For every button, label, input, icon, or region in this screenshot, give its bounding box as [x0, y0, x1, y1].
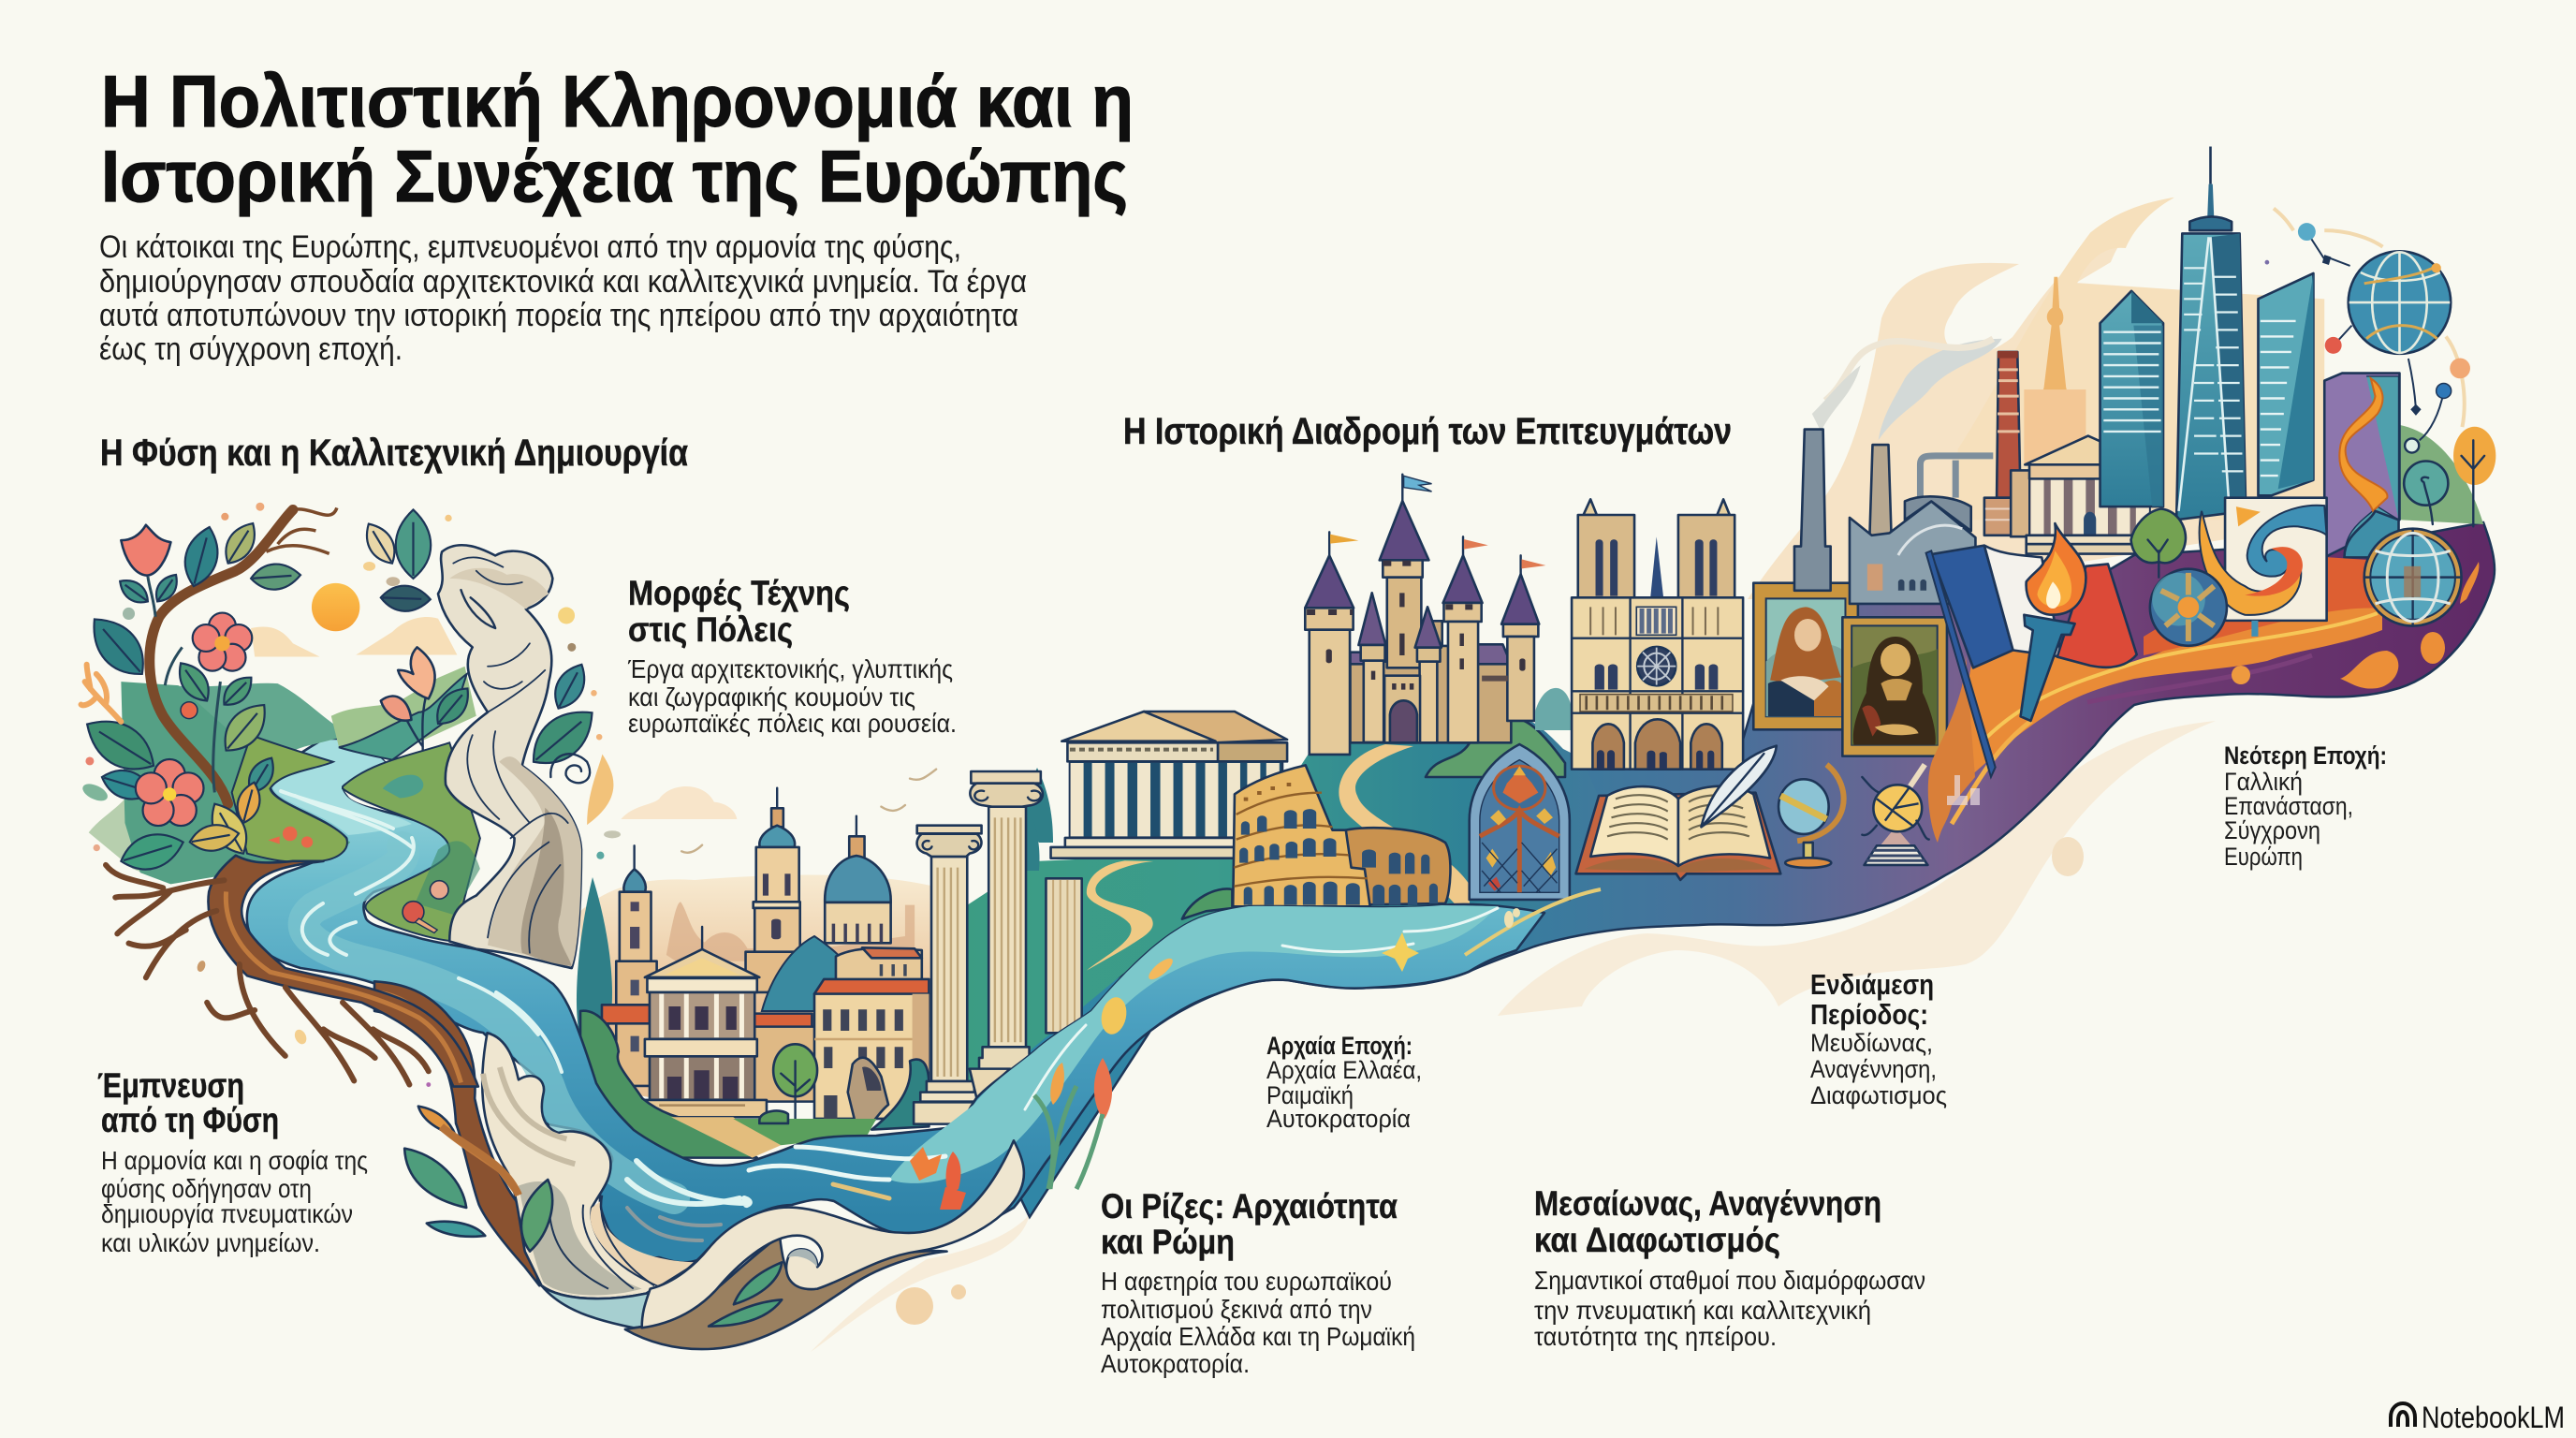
main title: Η Πολιτιστική Κληρονομιά και η: [101, 60, 1134, 142]
text block: inspiration from nature: και υλικών μνημείων.: [101, 1228, 320, 1257]
text block: roots, antiquity and Rome: Αρχαία Ελλάδα και τη Ρωμαϊκή: [1101, 1322, 1415, 1351]
timeline label: ancient era: Αρχαία Εποχή:: [1266, 1032, 1412, 1060]
timeline label: intermediate period: Ενδιάμεση: [1810, 968, 1934, 1001]
cream wave with curl: [642, 1140, 1024, 1328]
decorative peach swoosh under the flow: [811, 721, 2216, 1352]
text block: inspiration from nature: Η αρμονία και η σοφία της: [101, 1146, 368, 1175]
timeline label: ancient era: Αρχαία Ελλαέα,: [1266, 1056, 1422, 1084]
sandy road winding across the land: [1339, 744, 1470, 922]
red brick chimney: [1984, 351, 2021, 536]
astrolabe instrument: [1862, 765, 1929, 865]
text block: inspiration from nature: από τη Φύση: [101, 1101, 279, 1139]
green and teal land behind the ancient monuments: [964, 718, 1610, 1105]
medieval castle: [1305, 475, 1545, 755]
far-right tower: [1501, 555, 1545, 721]
tulip: [121, 525, 170, 576]
right-bank land: [343, 742, 480, 942]
text block: inspiration from nature: Έμπνευση: [97, 1066, 244, 1105]
city backdrop: warm sky, clouds and birds: [580, 770, 967, 1102]
green hillock beside the castle: [1426, 718, 1565, 777]
Liberty torch with flame: [2021, 523, 2086, 721]
factory hall: [1850, 496, 1975, 604]
broken column: [1046, 878, 1082, 1033]
river: light upper water: [273, 741, 412, 835]
small globe: [2150, 569, 2227, 646]
peach clouds: [251, 617, 457, 657]
cypress trees next to the city: [577, 768, 1053, 1030]
painting: Mona Lisa: [1842, 617, 1947, 756]
timeline label: modern era: Γαλλική: [2224, 768, 2303, 796]
sun: [312, 583, 359, 631]
blue hill: [762, 936, 867, 1011]
right tower: [1443, 536, 1488, 742]
brown trunk crown: [208, 856, 478, 1087]
five-petal flower: [136, 759, 204, 826]
timeline label: modern era: Επανάσταση,: [2224, 792, 2353, 820]
tree: [773, 1044, 817, 1121]
red buds: [181, 702, 313, 848]
timeline label: modern era: Νεότερη Εποχή:: [2224, 741, 2387, 770]
text block: roots, antiquity and Rome: Αυτοκρατορία.: [1101, 1349, 1250, 1378]
modern glass towers: [2100, 147, 2313, 520]
leaf on earth: [709, 1299, 782, 1327]
tower right: [2258, 273, 2313, 495]
tree, globe and painted panel on the band: [2131, 498, 2462, 646]
nature group: tree of flowers, statue and landscape: [77, 503, 621, 1087]
text block: inspiration from nature: [97, 1066, 368, 1257]
section heading: historical route: Η Ιστορική Διαδρομή των Επιτευγμάτων: [1123, 411, 1732, 452]
nodes: [2265, 223, 2470, 453]
red roofs: [602, 1005, 812, 1028]
text block: Middle Ages, Renaissance, Enlightenment: την πνευματική και καλλιτεχνική: [1534, 1296, 1871, 1325]
skyline backdrop: far tower and smoke: [1812, 198, 2324, 520]
neoclassical building: [2011, 436, 2155, 554]
timeline label: modern era: Ευρώπη: [2224, 843, 2303, 871]
earth layer with leaf: [625, 1236, 947, 1349]
text block: Middle Ages, Renaissance, Enlightenment: [1534, 1184, 1925, 1351]
small centre turret: [1415, 607, 1442, 742]
tall grey chimney: [1794, 430, 1831, 591]
small chimney: [1869, 445, 1892, 542]
large pink flower: [193, 613, 252, 671]
text block: art forms in cities: ευρωπαϊκές πόλεις και ρουσεία.: [628, 709, 957, 738]
teal hill shape right of castle: [1535, 688, 1573, 730]
teal tree: [2404, 462, 2448, 524]
light blue lower current: [542, 1236, 768, 1328]
upper red-roof building: [836, 947, 922, 980]
text block: art forms in cities: Μορφές Τέχνης: [628, 574, 850, 612]
tree trunk descending: [374, 981, 539, 1285]
orange tree: [2453, 427, 2496, 526]
orange sprig: [81, 665, 121, 722]
river: teal mid lit zones and streaks: [281, 791, 1498, 1240]
timeline label: ancient era: Αυτοκρατορία: [1266, 1105, 1411, 1133]
gatehouse: [1384, 676, 1420, 742]
timeline label: intermediate period: Αναγέννηση,: [1810, 1055, 1937, 1083]
flowers by statue: [381, 647, 435, 751]
globe: [2349, 251, 2451, 354]
central tower with spire: [2176, 147, 2246, 520]
painting: portrait in red hair: [1753, 583, 1858, 729]
text block: roots, antiquity and Rome: και Ρώμη: [1101, 1223, 1235, 1261]
river: rising light teal current: [889, 905, 1498, 1183]
pipes: [1920, 456, 1993, 498]
framed paintings: [1753, 583, 1947, 756]
spiral inner: [788, 1249, 817, 1267]
cream current: [482, 1033, 700, 1299]
flag pole: [1926, 550, 1996, 777]
red-orange petals in the water: [910, 1147, 993, 1210]
open book with quill: [1576, 746, 1780, 880]
road and bush: [1087, 860, 1153, 971]
painted swirl panel: [2200, 498, 2327, 637]
timeline label: modern era: [2224, 741, 2387, 871]
left tree branch: [150, 509, 293, 804]
far hills: [170, 683, 350, 792]
text block: art forms in cities: Έργα αρχιτεκτονικής, γλυπτικής: [627, 654, 953, 683]
leaves on the tree: [77, 517, 301, 877]
timeline label: intermediate period: Διαφωτισμος: [1810, 1081, 1947, 1109]
timeline label: ancient era: Ραιμαϊκή: [1266, 1081, 1354, 1109]
intro paragraph: Οι κάτοικαι της Ευρώπης, εμπνευομένοι από την αρμονία της φύσης,: [99, 229, 961, 265]
roots: [106, 865, 429, 1085]
round tree: [2131, 508, 2186, 578]
section heading: nature and creation: Η Φύση και η Καλλιτεχνική Δημιουργία: [100, 433, 688, 474]
tall column: [970, 771, 1043, 1070]
text block: roots, antiquity and Rome: πολιτισμού ξεκινά από την: [1101, 1295, 1372, 1324]
right palace: [814, 979, 929, 1119]
network globe and connection nodes: [2265, 209, 2470, 453]
text block: Middle Ages, Renaissance, Enlightenment: και Διαφωτισμός: [1534, 1221, 1780, 1259]
text block: Middle Ages, Renaissance, Enlightenment: Μεσαίωνας, Αναγέννηση: [1534, 1184, 1881, 1223]
intro paragraph: δημιούργησαν σπουδαία αρχιτεκτονικά και καλλιτεχνικά μνημεία. Τα έργα: [99, 264, 1027, 300]
palace with pediment: [637, 927, 767, 1117]
text block: roots, antiquity and Rome: [1101, 1187, 1415, 1378]
text block: Middle Ages, Renaissance, Enlightenment: ταυτότητα της ηπείρου.: [1534, 1322, 1777, 1351]
timeline label: intermediate period: Μευδίωνας,: [1810, 1029, 1933, 1057]
timeline label: modern era: Σύγχρονη: [2224, 816, 2320, 844]
intro paragraph: αυτά αποτυπώνουν την ιστορική πορεία της ηπείρου από την αρχαιότητα: [99, 298, 1018, 333]
big dome: [825, 816, 891, 943]
timeline label: ancient era: [1266, 1032, 1422, 1133]
connection lines and arcs: [2306, 232, 2444, 440]
left-bank land: [89, 788, 170, 884]
intro paragraph: [99, 229, 1027, 367]
left tower: [1305, 532, 1358, 755]
small left turret: [1358, 593, 1385, 742]
decorative dots: [80, 503, 621, 1087]
central keep: [1380, 475, 1432, 668]
orange stream across the purple band: [1928, 557, 2479, 843]
leaves beside trunk: [404, 1149, 466, 1208]
statue in the square: [848, 1058, 888, 1131]
text block: inspiration from nature: δημιουργία πνευματικών: [101, 1199, 353, 1228]
ancient temple on the hill: [1051, 712, 1287, 858]
globe on stand: [1778, 765, 1844, 868]
church tower left: [616, 845, 657, 1086]
timeline label: intermediate period: [1810, 968, 1947, 1109]
tower left: [2100, 291, 2163, 506]
right globe: [2364, 529, 2462, 626]
Colosseum: [1233, 765, 1450, 906]
statue-side leaves and spiral: [359, 509, 605, 777]
flowing band: modern purple-to-blue river base: [973, 522, 2495, 1217]
stained glass window: [1470, 744, 1570, 900]
French flag: [1926, 546, 2137, 777]
intro paragraph: έως τη σύγχρονη εποχή.: [99, 331, 402, 367]
text block: Middle Ages, Renaissance, Enlightenment: Σημαντικοί σταθμοί που διαμόρφωσαν: [1534, 1266, 1925, 1295]
wave group: cream, trunk and blue curl at lower left: [374, 981, 1024, 1349]
main title: Ιστορική Συνέχεια της Ευρώπης: [101, 135, 1128, 217]
shorter column: [914, 826, 1010, 1124]
industrial chimneys and factory: [1794, 351, 2021, 604]
Baroque city of domes and palaces: [580, 788, 929, 1158]
timeline label: intermediate period: Περίοδος:: [1810, 998, 1928, 1031]
text block: art forms in cities: και ζωγραφικής κουμούν τις: [628, 682, 915, 712]
gold streak and dots on the rising current: [1034, 889, 1601, 1189]
river: main water body flowing from nature to the modern era: [247, 739, 1544, 1263]
text block: roots, antiquity and Rome: Οι Ρίζες: Αρχαιότητα: [1101, 1187, 1398, 1225]
text block: art forms in cities: στις Πόλεις: [628, 610, 793, 649]
small flowers on right bank: [402, 881, 448, 933]
classical columns: [914, 771, 1232, 1124]
Notre-Dame cathedral: [1572, 499, 1743, 770]
text block: inspiration from nature: φύσης οδήγησαν οτη: [101, 1174, 312, 1203]
text block: roots, antiquity and Rome: Η αφετηρία του ευρωπαϊκού: [1101, 1267, 1392, 1296]
skyline backdrop: peach haze: [1748, 198, 2321, 599]
main title: [101, 60, 1134, 217]
green hill, trees and art block at right: [2324, 374, 2496, 557]
mid tower: [746, 788, 800, 992]
statue with flowing robes: [438, 545, 581, 968]
text block: art forms in cities: [627, 574, 957, 738]
bushes and lawn: [580, 1011, 757, 1158]
abstract art block: [2324, 374, 2399, 557]
